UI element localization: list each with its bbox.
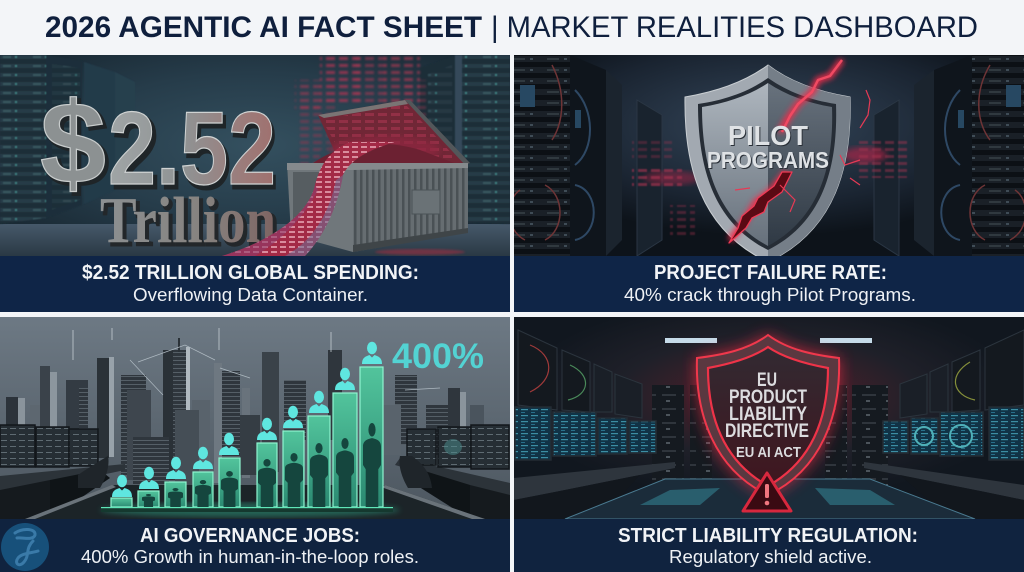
- right server racks: [420, 55, 510, 224]
- shield label: DIRECTIVE: [725, 421, 809, 442]
- silhouettes in bars: [142, 423, 381, 507]
- shipping container: [287, 100, 470, 252]
- EU shield: [697, 335, 839, 495]
- scene: data centre with overflowing container: [0, 55, 510, 260]
- left server racks: [0, 55, 135, 224]
- back server racks: [652, 385, 888, 495]
- shield label: [725, 370, 809, 461]
- left server racks: [509, 55, 662, 256]
- shield label: EU AI ACT: [736, 444, 801, 461]
- glow: [100, 503, 400, 517]
- digits: 2.52: [108, 91, 276, 207]
- scene: control room with regulatory shield: [514, 317, 1024, 519]
- right wall racks: [900, 330, 1024, 418]
- floor: [25, 485, 485, 519]
- panel: strict liability regulation: [514, 317, 1024, 572]
- red code columns: [295, 56, 430, 165]
- trillion label: Trillion: [103, 187, 279, 260]
- panel: project failure rate: [509, 55, 1024, 312]
- floor glow: [375, 249, 465, 255]
- shield crack: [729, 60, 870, 243]
- shield: [685, 65, 850, 262]
- caption: governance jobs: AI GOVERNANCE JOBS:: [140, 525, 360, 547]
- scene: cracked shield in server hall: [509, 55, 1024, 262]
- dollar sign: $: [40, 78, 106, 208]
- shield label: LIABILITY: [729, 404, 807, 425]
- icon: round logo: [1, 523, 49, 571]
- panel: AI governance jobs: [0, 317, 510, 572]
- 400% callout: 400%: [392, 337, 484, 376]
- digits: [110, 110, 276, 190]
- big number: [40, 96, 276, 196]
- person icons: [112, 342, 382, 497]
- right desks and monitors: [395, 425, 510, 519]
- right monitors: [883, 407, 1024, 460]
- trillion label: [100, 196, 277, 247]
- caption: liability: [514, 519, 1024, 572]
- shield label: PROGRAMS: [707, 147, 829, 173]
- red glitch text glow: [632, 138, 910, 235]
- caption: failure rate: PROJECT FAILURE RATE:: [654, 262, 887, 284]
- caption: liability: STRICT LIABILITY REGULATION:: [618, 525, 918, 547]
- caption: failure rate: [514, 256, 1024, 312]
- caption: global spending: [0, 256, 510, 312]
- title: regular part: | MARKET REALITIES DASHBOARD: [491, 11, 978, 44]
- left wall racks: [518, 330, 642, 418]
- panel: global spending: [0, 55, 510, 312]
- title bar: [0, 0, 1024, 55]
- shield label: [708, 126, 829, 169]
- glowing floor table: [565, 479, 975, 519]
- data ribbon: [222, 142, 395, 256]
- ceiling lights: [665, 338, 872, 343]
- caption: governance jobs: [0, 519, 510, 572]
- dollar sign: $: [43, 81, 109, 211]
- shield label: EU: [757, 370, 777, 391]
- shield glow: [697, 335, 839, 495]
- caption: liability: Regulatory shield active.: [669, 547, 872, 567]
- shield label: PILOT: [729, 121, 809, 152]
- bar chart: [100, 342, 400, 517]
- left monitors: [515, 407, 656, 460]
- trillion label: Trillion: [100, 184, 276, 257]
- caption: global spending: Overflowing Data Container.: [133, 285, 368, 305]
- desks: [514, 462, 1024, 500]
- left desks and monitors: [0, 425, 125, 519]
- caption: global spending: $2.52 TRILLION GLOBAL SPENDING:: [82, 262, 419, 284]
- caption: failure rate: 40% crack through Pilot Programs.: [624, 285, 916, 305]
- shield label: PRODUCT: [729, 387, 807, 408]
- caption: governance jobs: 400% Growth in human-in-the-loop roles.: [81, 547, 419, 567]
- digits: 2.52: [112, 95, 278, 211]
- shield label: PILOT: [728, 120, 808, 151]
- warning triangle: [743, 473, 791, 511]
- scene: skyline and growth bars: [0, 317, 510, 519]
- shield label: PROGRAMS: [708, 148, 830, 174]
- title: bold part: 2026 AGENTIC AI FACT SHEET: [45, 11, 482, 44]
- right server racks: [874, 55, 1024, 256]
- city skyline: [6, 328, 484, 492]
